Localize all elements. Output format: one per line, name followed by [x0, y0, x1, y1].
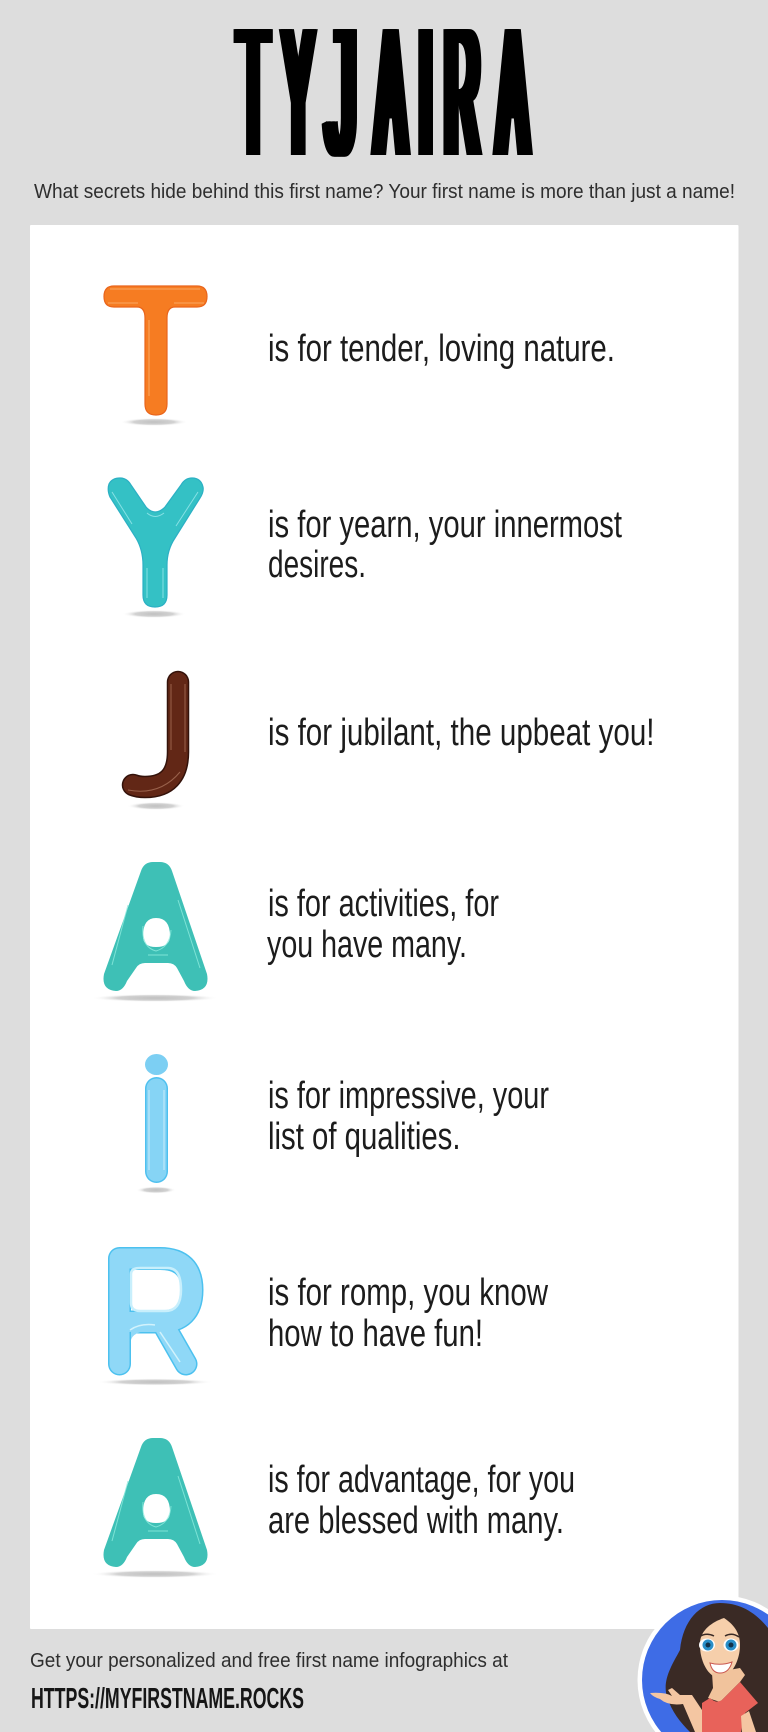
text: I lines: is for impressive, your: [268, 1075, 549, 1117]
icon: avatar: [638, 1596, 768, 1732]
icon: letter i: [136, 1054, 176, 1194]
text: Y lines: desires.: [268, 544, 366, 586]
text: A lines: [267, 883, 499, 966]
icon: letter T: [104, 286, 207, 426]
footer url: HTTPS://MYFIRSTNAME.ROCKS: [31, 1683, 304, 1715]
panel: letters: [30, 225, 738, 1629]
text: Y lines: is for yearn, your innermost: [268, 504, 622, 546]
icon: letter A second: [91, 1438, 219, 1578]
icon: letter Y: [108, 478, 203, 618]
text: R lines: how to have fun!: [268, 1313, 483, 1355]
text: A second lines: are blessed with many.: [268, 1500, 564, 1542]
text: J line: is for jubilant, the upbeat you!: [268, 712, 654, 754]
text: Y lines: [268, 504, 622, 586]
text: A lines: is for activities, for: [268, 883, 499, 925]
text: I lines: [268, 1075, 549, 1158]
text: R lines: is for romp, you know: [268, 1272, 548, 1314]
text: R lines: [268, 1272, 548, 1355]
icon: letter R: [97, 1258, 213, 1386]
footer text: Get your personalized and free first name infographics at: [30, 1650, 508, 1672]
text: I lines: list of qualities.: [268, 1116, 460, 1158]
icon: letter J: [127, 682, 185, 810]
icon: letter A: [91, 862, 219, 1002]
subtitle: What secrets hide behind this first name? Your first name is more than just a name!: [34, 181, 735, 203]
text: A second lines: is for advantage, for you: [268, 1459, 575, 1501]
text: A lines: you have many.: [267, 924, 467, 966]
title: [234, 0, 533, 194]
text: T line: is for tender, loving nature.: [268, 328, 615, 370]
text: A second lines: [268, 1459, 575, 1542]
